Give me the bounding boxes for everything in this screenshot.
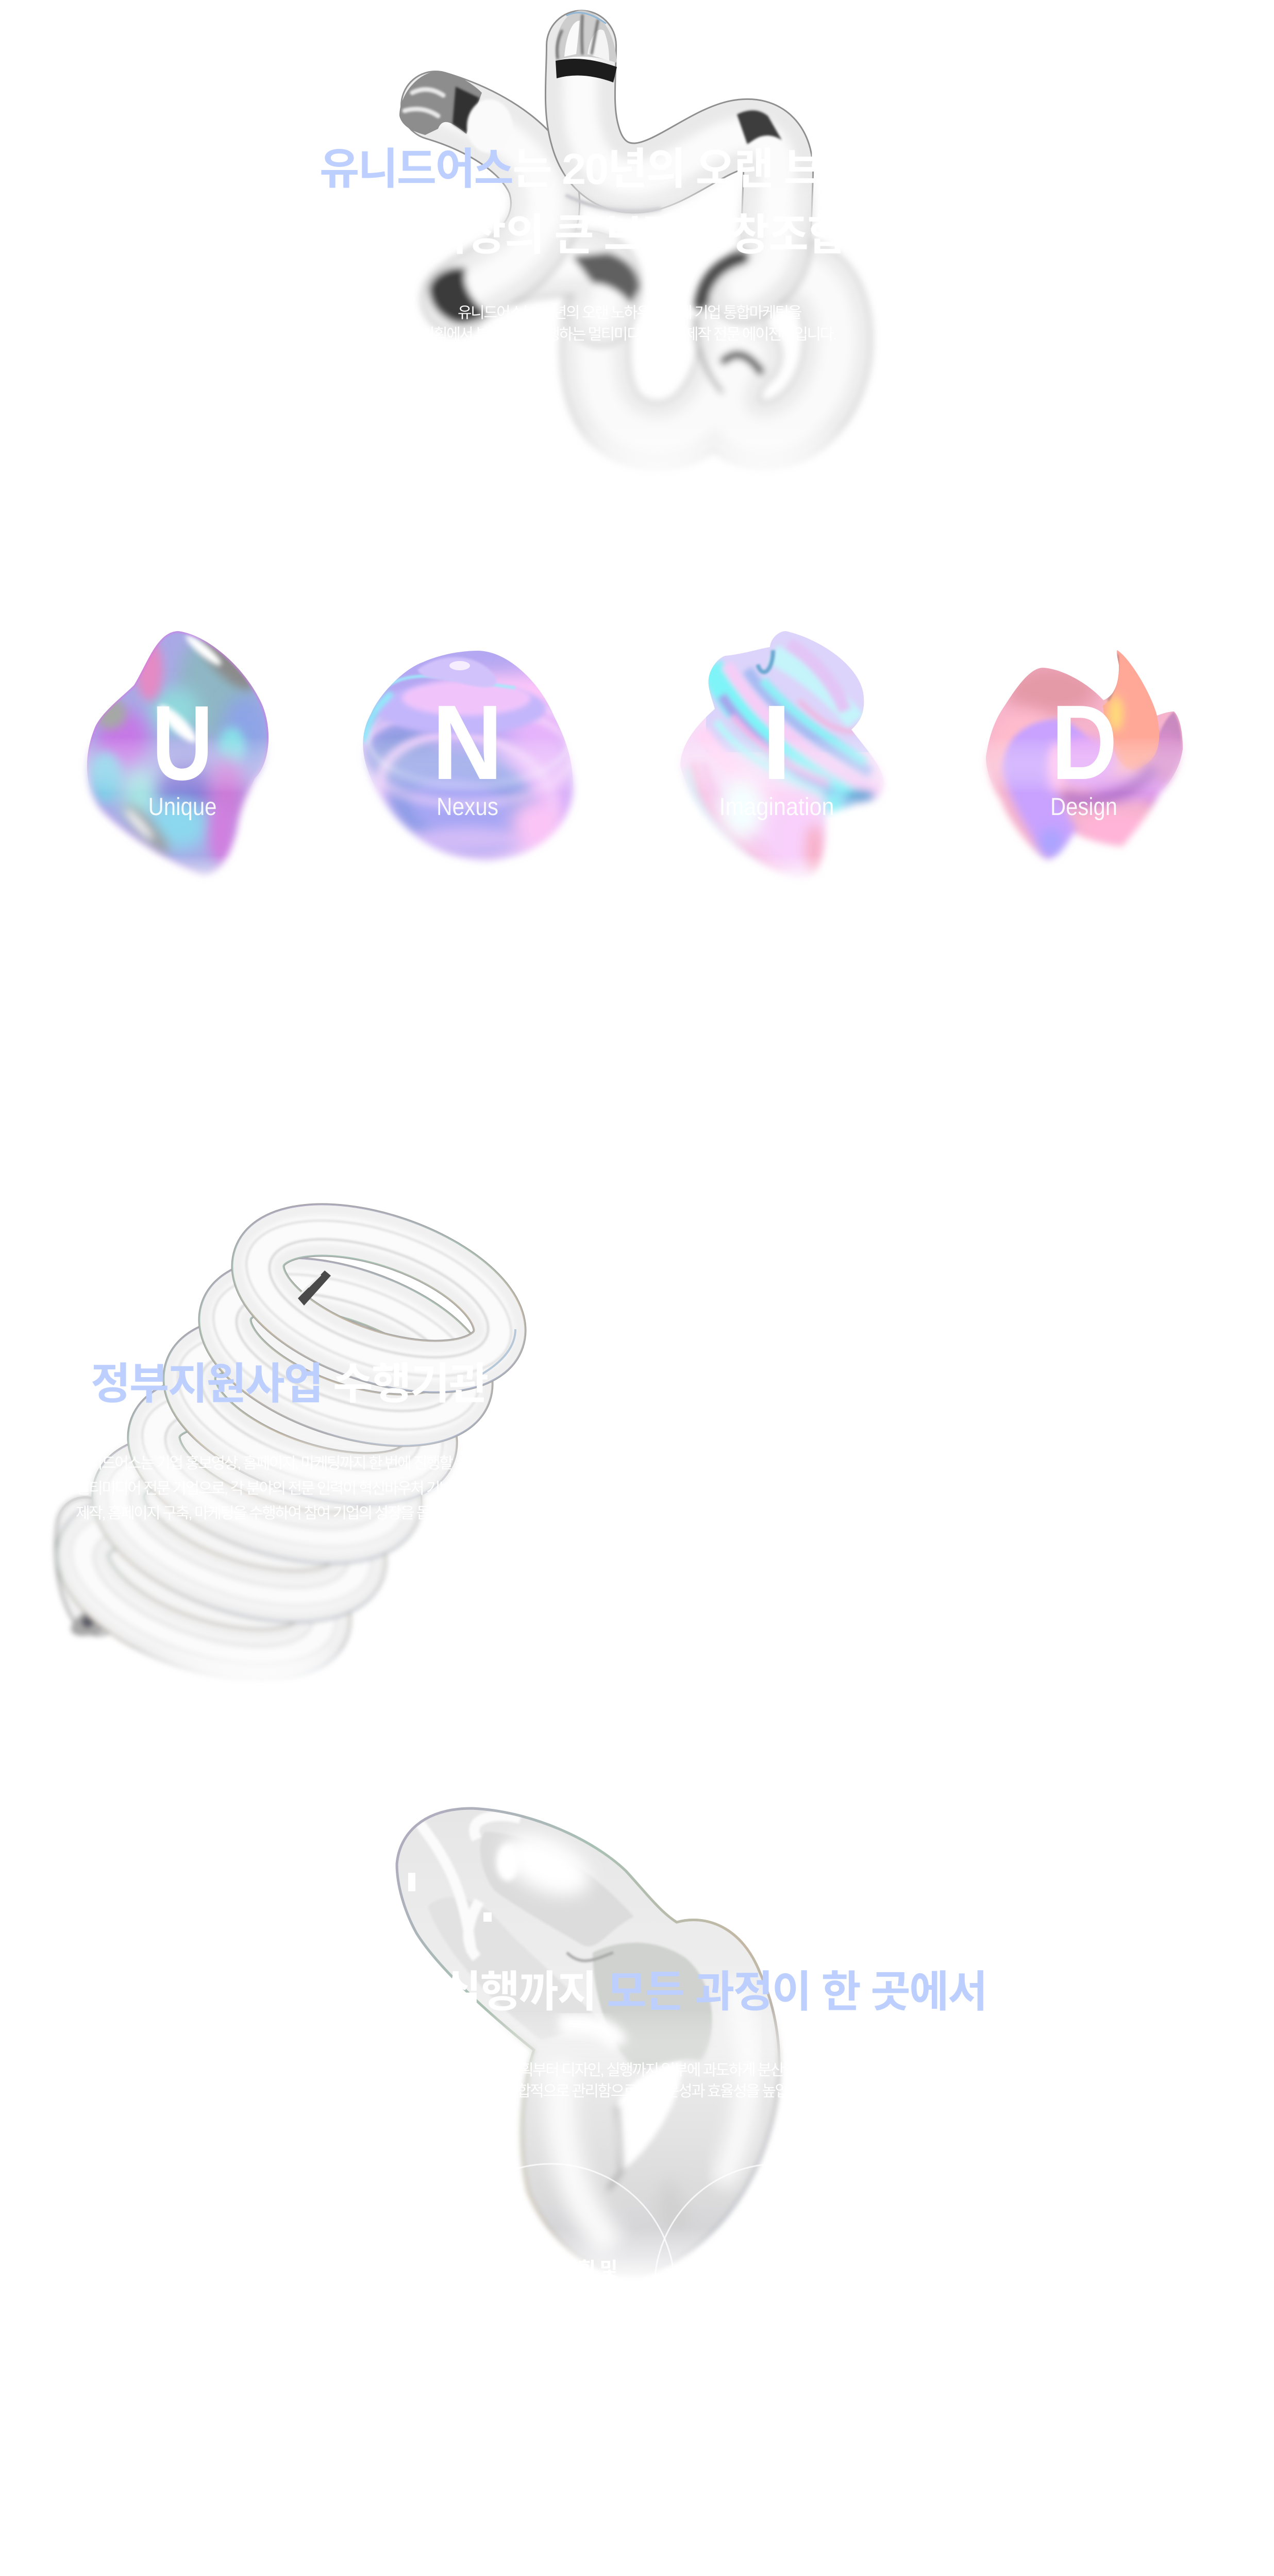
letter I with label: I	[762, 683, 792, 802]
letter U with label: Unique	[148, 793, 216, 821]
hero description	[421, 304, 836, 343]
blob: D pink and orange flame	[982, 644, 1191, 866]
government project heading: 정부지원사업 수행기관	[91, 1360, 488, 1408]
circle caption: 콘텐츠 기획 및	[504, 2259, 617, 2281]
glass and gradient artwork layer	[51, 10, 1184, 2274]
one-stop heading: 기획부터 디자인, 실행까지 모든 과정이 한 곳에서	[139, 1968, 986, 2016]
hero description: 기획에서 부터 제작 진행하는 멀티미디어 기획/제작 전문 에이전시입니다.	[421, 326, 836, 343]
letter N with label: N	[432, 683, 503, 802]
one-stop description: 통합적으로 관리함으로써 전문성과 효율성을 높입니다	[504, 2083, 815, 2100]
process circles	[427, 2164, 902, 2411]
letter N with label: Nexus	[437, 793, 498, 821]
government project description: 유니드어스는 기업 홍보영상, 홈페이지, 마케팅까지 한 번에 진행할 수 있는	[76, 1455, 498, 1472]
blob: N lavender swirl	[356, 644, 577, 872]
government project description: 제작, 홈페이지 구축, 마케팅을 수행하여 참여 기업의 성장을 돕습니다.	[76, 1505, 471, 1522]
government project description	[76, 1455, 498, 1522]
glass object: hero twisted tube	[399, 10, 837, 436]
letter I with label: Imagination	[719, 793, 834, 821]
letter D with label: Design	[1050, 793, 1117, 821]
letter I with label	[719, 683, 834, 821]
government project description: 멀티미디어 전문 기업으로, 각 분야의 전문 인력이 혁신바우처 기반 영상	[76, 1480, 482, 1497]
blob: I cyan and pink marbled swirl	[675, 629, 892, 886]
blob: U iridescent bubble	[83, 631, 269, 878]
hero heading: 유니드어스는 20년의 오랜 브랜딩 노하우로	[320, 145, 1064, 193]
letter U with label: U	[152, 684, 213, 802]
glass object: coil spring	[51, 1190, 531, 1695]
glass object: soap bubble knot	[397, 1808, 779, 2276]
hero heading	[320, 145, 1064, 259]
hero description: 유니드어스는 20년의 오랜 노하우를 통해 기업 통합마케팅을	[458, 304, 801, 321]
letter D with label: D	[1051, 683, 1117, 802]
one-stop description: 기획부터 디자인, 실행까지 일부에 과도하게 분산되지 않고	[507, 2062, 839, 2079]
hero heading: 상상 이상의 큰 브랜드 창조합니다	[340, 211, 924, 259]
one-stop description	[504, 2062, 839, 2100]
